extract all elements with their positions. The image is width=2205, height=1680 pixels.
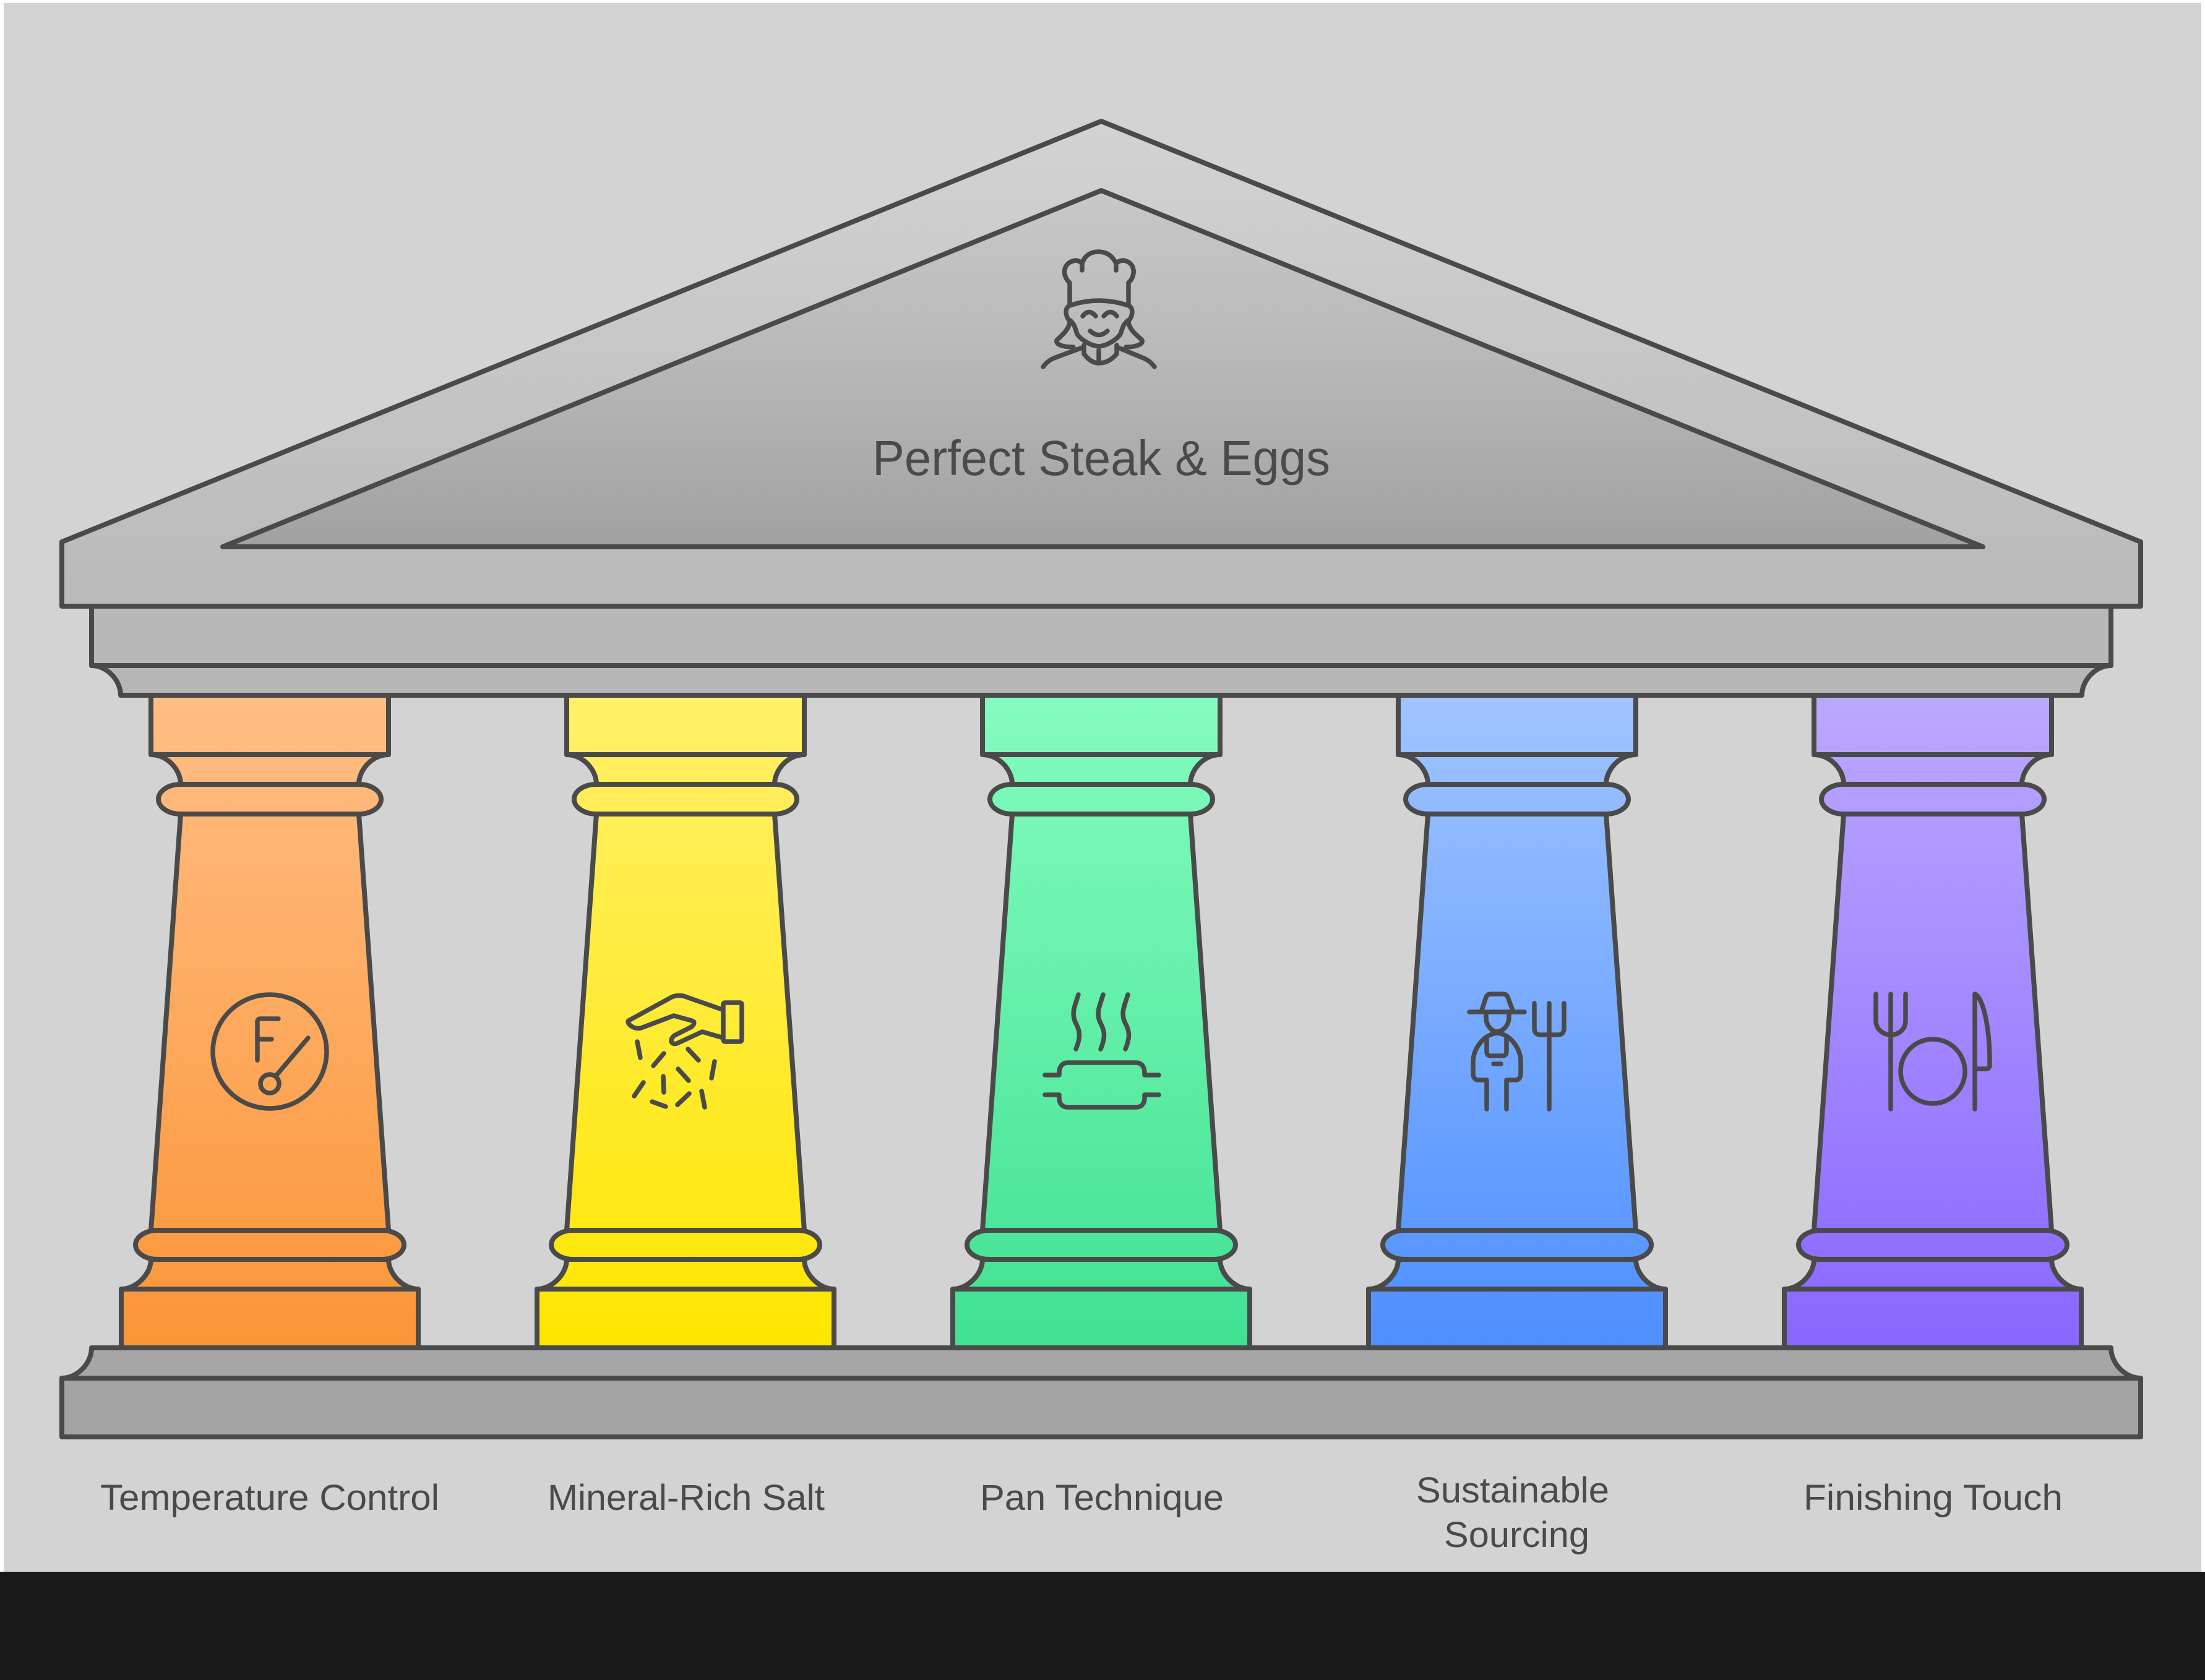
label: finishing touch: Finishing Touch [1803, 1478, 2063, 1518]
title: Perfect Steak & Eggs [872, 431, 1330, 486]
label: temperature control: Temperature Control [100, 1478, 439, 1518]
icon: hand sprinkling salt [628, 996, 742, 1107]
pillar: finishing touch [1784, 695, 2081, 1348]
pillar: temperature control [121, 695, 418, 1348]
label: sustainable sourcing [1416, 1470, 1609, 1555]
label: sustainable sourcing: Sourcing [1444, 1515, 1589, 1555]
label: pan technique: Pan Technique [980, 1478, 1224, 1518]
icon: farmer with pitchfork [1469, 994, 1564, 1109]
pillar: mineral-rich salt [537, 695, 834, 1348]
pillar: sustainable sourcing [1369, 695, 1666, 1348]
temple roof and entablature [62, 121, 2141, 695]
icon: fork, plate and knife [1876, 994, 1990, 1109]
bottom black band [0, 1572, 2205, 1680]
pillar: pan technique [953, 695, 1250, 1348]
temple base [62, 1348, 2141, 1437]
label: mineral-rich salt: Mineral-Rich Salt [548, 1478, 825, 1518]
label: sustainable sourcing: Sustainable [1416, 1470, 1609, 1511]
icon: chef [1043, 252, 1154, 367]
icon: steaming pan [1045, 995, 1159, 1107]
icon: thermometer dial [213, 995, 327, 1108]
